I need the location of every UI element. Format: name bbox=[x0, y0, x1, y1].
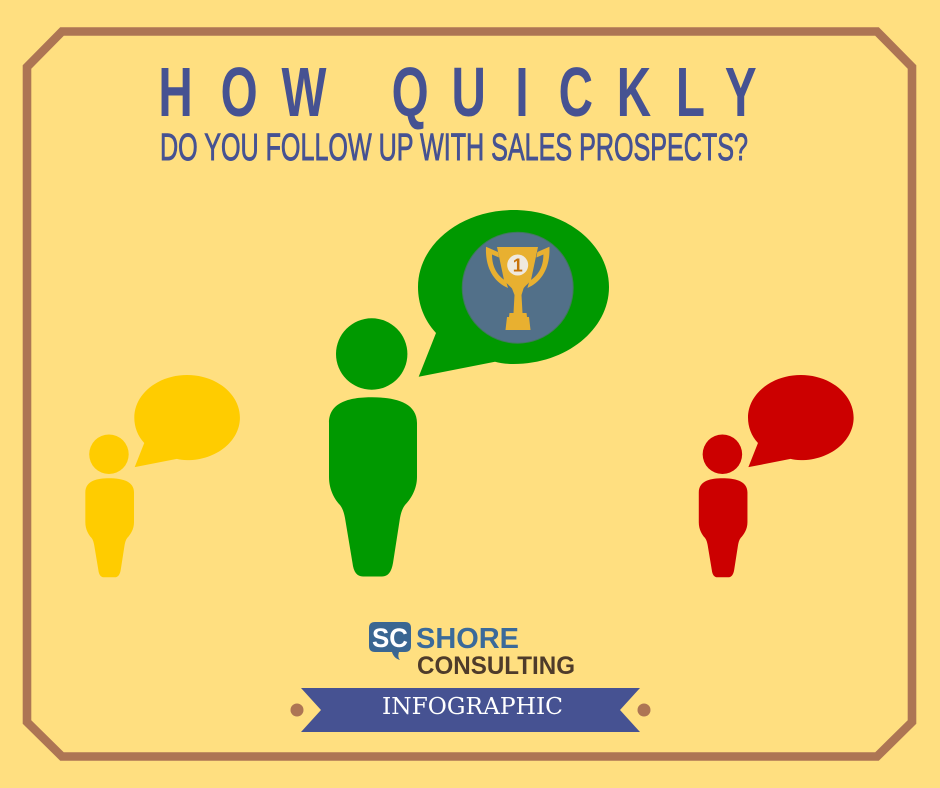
red person bbox=[699, 435, 747, 577]
trophy badge circle bbox=[462, 232, 573, 343]
ribbon dots bbox=[290, 704, 304, 716]
logo: shore consulting: SHORE bbox=[416, 623, 519, 655]
logo badge bbox=[369, 622, 411, 660]
logo: shore consulting: CONSULTING bbox=[417, 652, 575, 680]
icon: trophy: 1 bbox=[513, 256, 523, 276]
ribbon banner bbox=[290, 688, 650, 732]
first place medal bbox=[507, 254, 528, 276]
yellow person bbox=[85, 435, 134, 577]
yellow speech bubble bbox=[134, 375, 240, 467]
icon: trophy bbox=[486, 247, 549, 330]
red speech bubble bbox=[748, 375, 854, 467]
logo: shore consulting: SC bbox=[372, 623, 408, 653]
ribbon label: INFOGRAPHIC bbox=[382, 694, 563, 720]
logo: shore consulting bbox=[369, 622, 575, 680]
green person bbox=[329, 318, 417, 576]
title: how quickly: HOW QUICKLY bbox=[158, 53, 757, 131]
green speech bubble with trophy bbox=[418, 210, 609, 377]
